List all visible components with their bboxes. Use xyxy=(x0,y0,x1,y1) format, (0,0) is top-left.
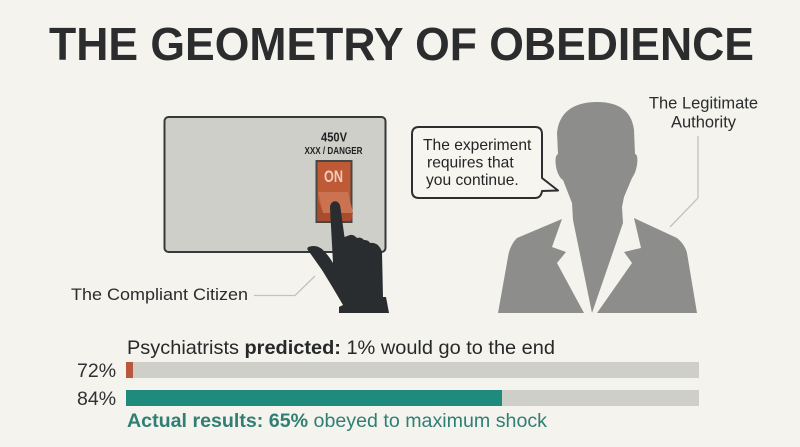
speech text: requires that xyxy=(427,154,514,172)
label: the compliant citizen xyxy=(71,276,315,304)
danger label: XXX / DANGER xyxy=(304,146,363,157)
speech text: you continue. xyxy=(426,172,519,189)
switch xyxy=(316,161,353,222)
icon: pointing hand xyxy=(307,201,389,313)
predicted heading: Psychiatrists predicted: 1% would go to the end xyxy=(127,337,555,359)
bar: actual xyxy=(126,390,699,406)
bar: predicted xyxy=(126,362,699,378)
label: the legitimate authority: Authority xyxy=(671,114,737,132)
label: 84%: 84% xyxy=(77,388,116,410)
panel: shock generator xyxy=(164,117,386,252)
voltage label: 450V xyxy=(321,130,348,144)
title: THE GEOMETRY OF OBEDIENCE xyxy=(49,18,754,70)
label: the compliant citizen: The Compliant Citizen xyxy=(71,286,248,304)
icon: authority silhouette xyxy=(498,102,697,313)
switch on label: ON xyxy=(324,167,343,186)
leader line: authority xyxy=(670,136,698,227)
actual results caption: Actual results: 65% obeyed to maximum shock xyxy=(127,411,548,432)
speech text: The experiment xyxy=(423,137,532,154)
label: the legitimate authority xyxy=(649,94,758,227)
label: 72%: 72% xyxy=(77,360,116,382)
leader line: citizen xyxy=(254,276,315,296)
speech bubble xyxy=(412,127,558,198)
chart: predicted vs actual xyxy=(77,337,699,432)
label: the legitimate authority: The Legitimate xyxy=(649,94,758,112)
